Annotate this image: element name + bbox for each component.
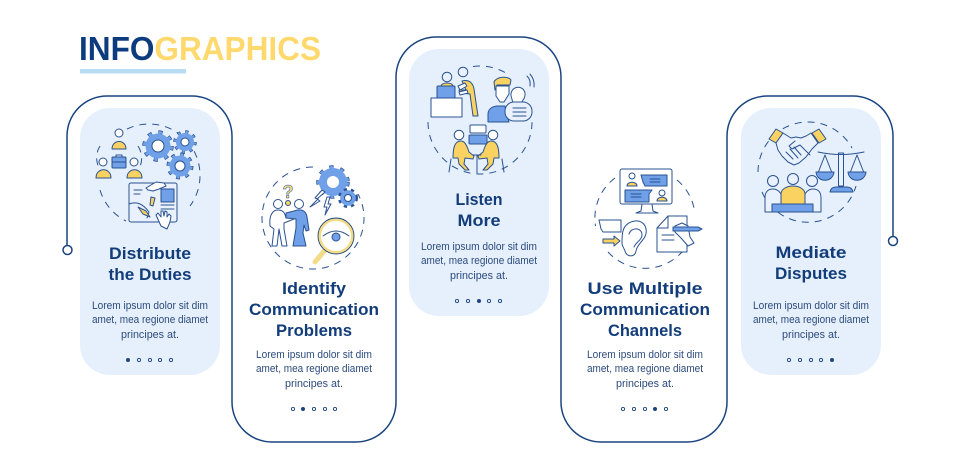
icon: team, gears and documents: [96, 124, 200, 229]
text block: amet, mea regione diamet: [587, 363, 703, 375]
text block: principes at.: [616, 378, 674, 390]
text block: amet, mea regione diamet: [256, 363, 372, 375]
icon: people, gears and magnifier: ?: [282, 182, 294, 202]
heading: [108, 244, 192, 284]
text block: [421, 241, 537, 282]
pagination dots: [621, 407, 668, 411]
heading: [456, 190, 502, 230]
heading: More: [458, 211, 500, 230]
heading: [580, 279, 710, 340]
text block: principes at.: [450, 270, 508, 282]
heading: [249, 279, 379, 340]
text block: [587, 349, 703, 390]
pagination dots: [291, 407, 337, 411]
heading: Listen: [456, 190, 502, 209]
heading: Channels: [608, 321, 682, 340]
text block: principes at.: [285, 378, 343, 390]
text block: [256, 349, 372, 390]
panel: use multiple communication channels: [580, 169, 710, 411]
text block: Lorem ipsum dolor sit dim: [92, 300, 208, 312]
heading: Problems: [276, 321, 352, 340]
heading: the Duties: [108, 265, 192, 284]
text block: [753, 300, 869, 341]
heading: Use Multiple: [588, 279, 702, 298]
text block: Lorem ipsum dolor sit dim: [256, 349, 372, 361]
icon: handshake, scales and meeting: [758, 122, 866, 222]
heading: [775, 243, 847, 283]
text block: amet, mea regione diamet: [92, 314, 208, 326]
icon: monitor, ear and document: [595, 169, 702, 268]
heading: Distribute: [109, 244, 191, 263]
text block: amet, mea regione diamet: [421, 255, 537, 267]
panel: mediate disputes: [753, 122, 869, 362]
panel: distribute the duties: [92, 124, 208, 362]
pagination dots: [126, 358, 173, 362]
heading: Disputes: [775, 264, 847, 283]
text block: principes at.: [782, 329, 840, 341]
text block: Lorem ipsum dolor sit dim: [421, 241, 537, 253]
pagination dots: [455, 299, 502, 303]
icon: people, gears and magnifier: [262, 167, 364, 269]
title: INFOGRAPHICS: [79, 30, 321, 67]
pagination dots: [787, 358, 834, 362]
text block: principes at.: [121, 329, 179, 341]
connecting outline: [63, 37, 898, 442]
text block: amet, mea regione diamet: [753, 314, 869, 326]
text block: Lorem ipsum dolor sit dim: [753, 300, 869, 312]
heading: Mediate: [776, 243, 846, 262]
text block: Lorem ipsum dolor sit dim: [587, 349, 703, 361]
panel: listen more: [421, 66, 537, 303]
heading: Communication: [580, 300, 710, 319]
text block: [92, 300, 208, 341]
heading: Identify: [282, 279, 347, 298]
panel: identify communication problems: [249, 167, 379, 411]
panel: background cards: [80, 49, 881, 375]
icon: listening scenes: [428, 66, 534, 174]
heading: Communication: [249, 300, 379, 319]
